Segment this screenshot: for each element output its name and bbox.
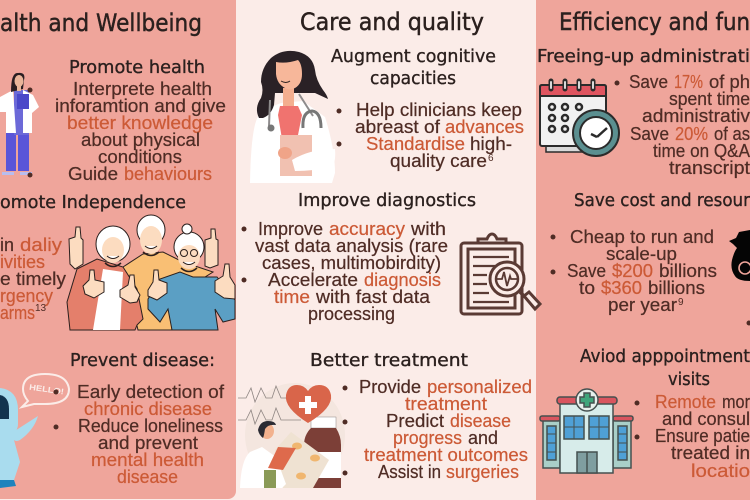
text: cost points: $200	[612, 261, 653, 281]
text: treatment points: treatment outcomes	[364, 445, 528, 465]
text: cost points	[550, 227, 717, 315]
text: promote health points: Interprete health	[73, 79, 212, 99]
text: cost points: per year	[608, 295, 677, 315]
text: cognitive capacity points: abreast of	[355, 117, 441, 137]
heading: promote health: Promote health	[69, 57, 205, 78]
panel: health and wellbeing	[0, 0, 236, 499]
text: administration points: of ph	[709, 72, 750, 92]
illustration: three seniors giving thumbs up	[67, 215, 235, 330]
text: promote health points: conditions	[98, 147, 182, 167]
text: treatment points: treatment	[405, 394, 487, 414]
text: diagnostics points: processing	[308, 304, 395, 324]
text: diagnostics points: cases, multimobirdity)	[262, 253, 441, 273]
text: diagnostics points: vast data analysis (rare	[255, 236, 448, 256]
text: treatment points: progress	[393, 428, 462, 448]
text: promote health points	[28, 79, 226, 184]
text: independence points: in	[0, 235, 14, 255]
heading: improve diagnostics: Improve diagnostics	[298, 190, 476, 211]
text: cost points: 9	[678, 297, 684, 308]
text: prevent disease points: Reduce loneliness	[78, 416, 223, 436]
text: cognitive capacity points: high-	[470, 134, 512, 154]
icon: hospital building	[540, 389, 633, 473]
text: administration points: Save	[630, 124, 669, 144]
text: independence points: ivities	[0, 252, 45, 272]
text: prevent disease points	[54, 382, 225, 487]
text: cognitive capacity points: Standardise	[366, 134, 465, 154]
text: diagnostics points: Improve	[258, 219, 323, 239]
illustration: doctor with clipboard	[250, 51, 335, 183]
heading: prevent disease: Prevent disease:	[70, 350, 215, 371]
text: administration points: 20%	[675, 124, 708, 144]
text: cost points: to	[579, 278, 595, 298]
text: diagnostics points: accuracy	[329, 219, 405, 239]
text: independence points: rgency	[0, 286, 53, 306]
text: promote health points: behaviours	[124, 164, 212, 184]
heading: freeing-up administration: Freeing-up administrati	[537, 46, 750, 67]
heading: better treatment: Better treatment	[310, 350, 468, 371]
text: treatment points: disease	[450, 411, 511, 431]
text: diagnostics points: with	[410, 219, 446, 239]
text: cost points: billions	[659, 261, 717, 281]
heading: augment cognitive capacities: Augment cognitive	[331, 46, 496, 67]
text: administration points: spent time	[669, 89, 750, 109]
text: treatment points: Predict	[386, 411, 444, 431]
text: administration points	[614, 72, 750, 178]
icon: calendar with clock	[540, 81, 619, 156]
text: independence points: e timely	[0, 269, 66, 289]
text: administration points: administrativ	[642, 106, 750, 126]
text: prevent disease points: disease	[117, 467, 178, 487]
text: promote health points: about physical	[81, 130, 200, 150]
text: diagnostics points: with fast data	[315, 287, 431, 307]
text: prevent disease points: mental health	[91, 450, 204, 470]
text: diagnostics points: diagnosis	[364, 270, 441, 290]
text: cognitive capacity points	[336, 100, 524, 171]
text: remote care points: and consul	[662, 409, 750, 429]
text: cognitive capacity points: 6	[488, 153, 494, 164]
heading: augment cognitive capacities	[331, 46, 496, 89]
text: prevent disease points: chronic disease	[84, 399, 212, 419]
text: cognitive capacity points: Help clinicians keep	[356, 100, 522, 120]
text: cost points: scale-up	[606, 244, 677, 264]
text: promote health points: inforamtion and give	[55, 96, 226, 116]
text: cost points: billions	[648, 278, 705, 298]
icon: standing doctor	[0, 73, 39, 175]
heading: avoid appointment visits	[580, 346, 750, 390]
icon: money bag	[729, 230, 750, 326]
illustration: robot with hello bubble: HELLO!	[29, 383, 65, 396]
heading: health and wellbeing: alth and Wellbeing	[0, 9, 202, 37]
text: prevent disease points: Early detection of	[77, 382, 225, 402]
heading: avoid appointment visits: visits	[668, 369, 710, 390]
text: remote care points	[634, 392, 750, 481]
text: prevent disease points: and prevent	[98, 433, 198, 453]
panel: care and quality	[237, 0, 540, 500]
text: treatment points: and	[468, 428, 498, 448]
text: promote health points: better knowledge	[67, 113, 213, 133]
text: treatment points: surgeries	[446, 462, 519, 482]
text: treatment points	[342, 377, 532, 482]
illustration: robot with hello bubble	[0, 374, 69, 488]
text: independence points	[0, 235, 66, 323]
panel: efficiency and functions	[536, 0, 750, 500]
text: diagnostics points: Accelerate	[268, 270, 358, 290]
text: independence points: arms	[0, 303, 35, 323]
heading: augment cognitive capacities: capacities	[370, 68, 456, 89]
text: diagnostics points	[242, 219, 448, 324]
icon: clipboard with magnifier	[461, 234, 540, 314]
text: remote care points: treated in	[671, 443, 750, 463]
text: remote care points: locatio	[691, 461, 750, 481]
text: diagnostics points: time	[274, 287, 310, 307]
text: treatment points: Provide	[359, 377, 421, 397]
heading: care and quality: Care and quality	[300, 8, 484, 36]
heading: promote independence: omote Independence	[0, 192, 186, 213]
text: promote health points: Guide	[68, 164, 118, 184]
text: cognitive capacity points: quality care	[390, 151, 487, 171]
text: treatment points: Assist in	[378, 462, 441, 482]
text: independence points: 13	[35, 303, 47, 314]
text: independence points: daliy	[20, 235, 62, 255]
text: cost points: Save	[567, 261, 606, 281]
illustration: treatment with heart and medicine	[238, 383, 345, 488]
text: cost points: $360	[601, 278, 642, 298]
text: administration points: 17%	[674, 72, 703, 92]
text: administration points: transcript	[669, 158, 750, 178]
text: cognitive capacity points: advances	[445, 117, 524, 137]
text: administration points: Save	[629, 72, 668, 92]
text: remote care points: Remote	[655, 392, 716, 412]
text: cost points: Cheap to run and	[570, 227, 714, 247]
text: treatment points: personalized	[427, 377, 532, 397]
